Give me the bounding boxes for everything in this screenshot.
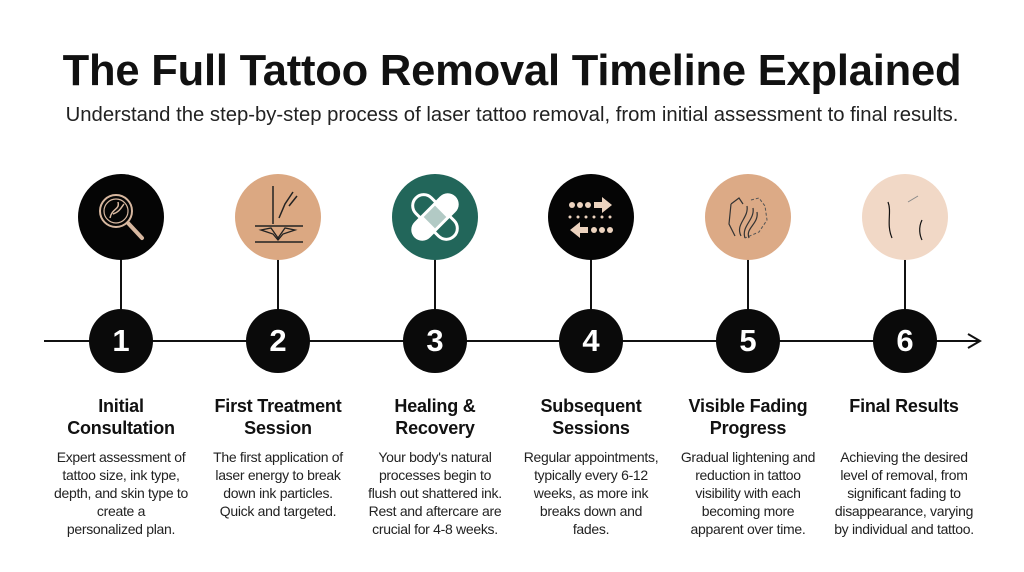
- step 6 text: Final Results: [849, 396, 959, 416]
- step 1 text: Consultation: [67, 418, 175, 438]
- step 3 text: Rest and aftercare are: [369, 503, 501, 519]
- step 6 text: level of removal, from: [840, 467, 968, 483]
- step 2 text: First Treatment: [214, 396, 342, 416]
- step 1 text: Expert assessment of: [57, 449, 185, 465]
- step 3 text: processes begin to: [379, 467, 491, 483]
- step 4 text: weeks, as more ink: [534, 485, 648, 501]
- step 1 text: Initial: [98, 396, 144, 416]
- step 2 text: [213, 396, 344, 519]
- step 4 text: typically every 6-12: [534, 467, 648, 483]
- icon: fading tattoo: [705, 174, 791, 260]
- timeline axis arrow: [44, 333, 982, 349]
- step 6 text: [834, 396, 974, 537]
- step 4 text: fades.: [573, 521, 609, 537]
- number 3: [403, 309, 467, 373]
- step 5 text: Visible Fading: [689, 396, 807, 416]
- step 2 text: Session: [244, 418, 312, 438]
- step 1 text: [54, 396, 188, 537]
- step 3 text: flush out shattered ink.: [368, 485, 502, 501]
- icon: bandage healing: [392, 174, 478, 260]
- step 5 text: visibility with each: [695, 485, 801, 501]
- step 1 text: create a: [97, 503, 145, 519]
- step 6 text: disappearance, varying: [835, 503, 973, 519]
- step 5 text: [681, 396, 815, 537]
- icon: magnifier consultation: [78, 174, 164, 260]
- step 2 text: laser energy to break: [215, 467, 341, 483]
- number 1: [89, 309, 153, 373]
- step 1 text: depth, and skin type to: [54, 485, 188, 501]
- step 3 text: crucial for 4-8 weeks.: [372, 521, 498, 537]
- title: The Full Tattoo Removal Timeline Explained: [63, 47, 961, 95]
- number 4: 4: [582, 323, 600, 358]
- step 5 text: reduction in tattoo: [695, 467, 801, 483]
- step 5 text: Gradual lightening and: [681, 449, 815, 465]
- step 5 text: Progress: [710, 418, 786, 438]
- step 4 text: [524, 396, 658, 537]
- step 4 text: breaks down and: [540, 503, 642, 519]
- step 6 text: significant fading to: [847, 485, 961, 501]
- icon: arrows sessions: [548, 174, 634, 260]
- subtitle: Understand the step-by-step process of laser tattoo removal, from initial assessment to final results.: [66, 104, 958, 126]
- number 5: [716, 309, 780, 373]
- step 6 text: Achieving the desired: [840, 449, 968, 465]
- step 1 text: tattoo size, ink type,: [62, 467, 180, 483]
- step 3 text: [368, 396, 502, 537]
- step 2 text: down ink particles.: [223, 485, 333, 501]
- number 2: [246, 309, 310, 373]
- step 2 text: The first application of: [213, 449, 343, 465]
- number 4: [559, 309, 623, 373]
- step 4 text: Subsequent: [540, 396, 642, 416]
- step 3 text: Recovery: [395, 418, 475, 438]
- icon: clear skin: [862, 174, 948, 260]
- number 1: 1: [112, 323, 130, 358]
- step 3 text: Your body's natural: [378, 449, 492, 465]
- number 6: 6: [896, 323, 914, 358]
- step 4 text: Regular appointments,: [524, 449, 658, 465]
- step 3 text: Healing &: [394, 396, 476, 416]
- step 5 text: becoming more: [702, 503, 794, 519]
- number 5: 5: [739, 323, 757, 358]
- number 3: 3: [426, 323, 444, 358]
- step 2 text: Quick and targeted.: [220, 503, 336, 519]
- step 5 text: apparent over time.: [691, 521, 805, 537]
- number 6: [873, 309, 937, 373]
- icon: laser treatment: [235, 174, 321, 260]
- step 6 text: by individual and tattoo.: [834, 521, 974, 537]
- step 4 text: Sessions: [552, 418, 630, 438]
- step 1 text: personalized plan.: [67, 521, 175, 537]
- number 2: 2: [269, 323, 287, 358]
